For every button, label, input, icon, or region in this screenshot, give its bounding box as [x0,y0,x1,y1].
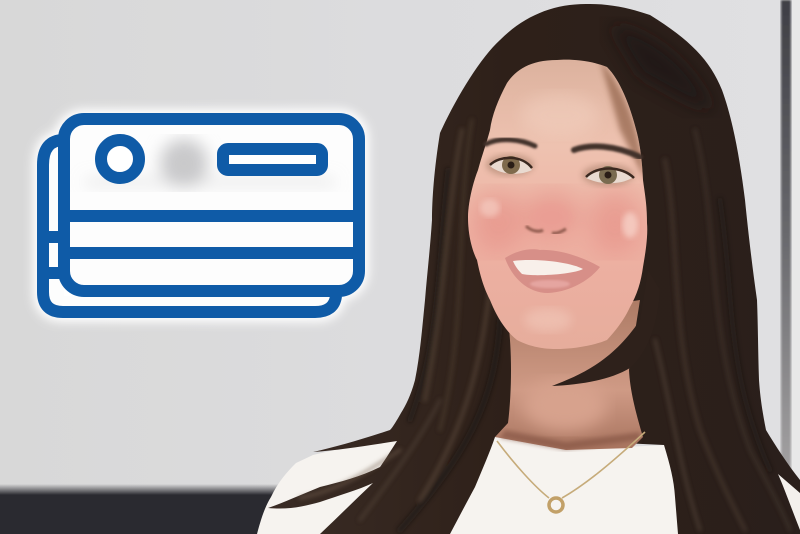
collar shadow [500,430,640,450]
cheek highlights [480,199,500,217]
back card interior [43,140,336,312]
icon glow [43,119,359,312]
back card outline [43,140,336,312]
lips and smile [505,249,600,293]
white top at far right [778,474,800,530]
presenter [257,4,800,534]
card number pill [223,149,322,170]
neck highlight [523,379,607,431]
hair strands [300,120,790,530]
picture frame at right edge [781,0,800,480]
card stripes [64,216,359,253]
grey smudge on card [85,139,335,187]
icon: credit cards [43,119,359,312]
neck [495,300,643,450]
card interior fill [64,119,359,291]
dark crown [610,25,712,110]
hair strand across neck [552,270,660,386]
eyes [490,156,634,184]
face shading [472,60,645,332]
nose [526,204,572,233]
eyebrows [486,140,640,157]
necklace [497,432,645,512]
cheeks [472,190,641,254]
forehead edge shadow [600,60,645,180]
white top [257,437,800,534]
back hair [268,4,800,534]
face [468,60,647,349]
back card stripes [43,237,64,273]
eye sockets [486,154,534,176]
card chip circle [101,140,139,178]
front card outline [64,119,359,291]
